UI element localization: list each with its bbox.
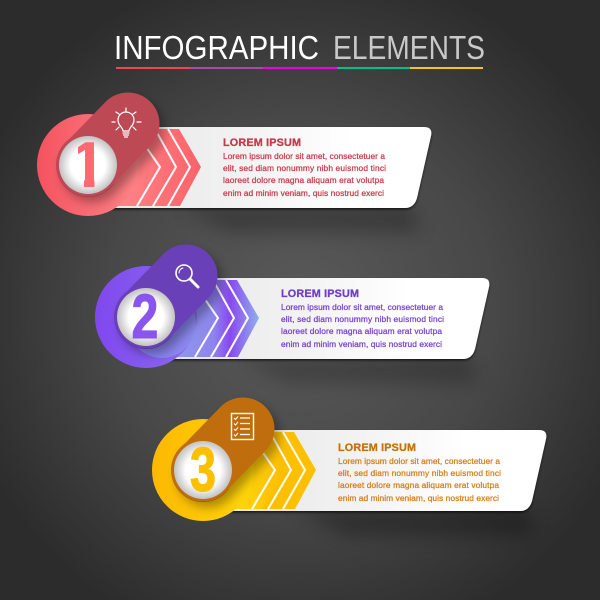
- heading: LOREM IPSUM: [338, 442, 416, 454]
- body text: laoreet dolore magna aliquam erat volutpa: [338, 480, 499, 490]
- panel: step 2: [95, 265, 489, 383]
- body text: laoreet dolore magna aliquam erat volutpa: [223, 175, 384, 185]
- number 1: 1: [70, 128, 106, 201]
- white text card: [225, 430, 546, 511]
- icon: magnifier: [176, 265, 198, 287]
- icon tab: [146, 276, 186, 317]
- body text: enim ad minim veniam, quis nostrud exerci: [338, 493, 499, 503]
- number circle: [95, 266, 197, 368]
- chevron arrows: [110, 129, 201, 206]
- number 3: 3: [190, 435, 216, 505]
- icon tab: [88, 124, 128, 165]
- body text: Lorem ipsum dolor sit amet, consectetuer a: [281, 302, 443, 312]
- title: [114, 30, 485, 67]
- number badge: [95, 265, 198, 368]
- title underline: [116, 67, 483, 69]
- white text card: [168, 278, 489, 359]
- title word: ELEMENTS: ELEMENTS: [333, 30, 485, 67]
- white text card: [110, 127, 431, 208]
- body text: [338, 456, 501, 503]
- chevron arrows: [225, 432, 316, 509]
- body text: elit, sed diam nonummy nibh euismod tinci: [281, 314, 444, 324]
- body text: Lorem ipsum dolor sit amet, consectetuer a: [338, 456, 500, 466]
- heading: LOREM IPSUM: [281, 288, 359, 300]
- title word: INFOGRAPHIC: INFOGRAPHIC: [114, 30, 319, 67]
- panel: step 3: [152, 414, 546, 535]
- chevron arrows: [168, 280, 259, 357]
- icon tab: [203, 429, 243, 470]
- body text: enim ad minim veniam, quis nostrud exerci: [223, 188, 384, 198]
- icon: light bulb: [112, 108, 141, 137]
- number badge: [152, 414, 254, 521]
- body text: [281, 302, 444, 349]
- body text: enim ad minim veniam, quis nostrud exerci: [281, 339, 442, 349]
- body text: elit, sed diam nonummy nibh euismod tinci: [223, 163, 386, 173]
- body text: elit, sed diam nonummy nibh euismod tinci: [338, 468, 501, 478]
- body text: [223, 151, 386, 198]
- number circle: [152, 419, 254, 521]
- body text: laoreet dolore magna aliquam erat volutpa: [281, 326, 442, 336]
- number 2: 2: [132, 281, 158, 351]
- panel: step 1: [37, 108, 431, 232]
- body text: Lorem ipsum dolor sit amet, consectetuer a: [223, 151, 385, 161]
- icon: checklist: [232, 414, 254, 440]
- heading: LOREM IPSUM: [223, 137, 301, 149]
- number circle: [37, 114, 139, 216]
